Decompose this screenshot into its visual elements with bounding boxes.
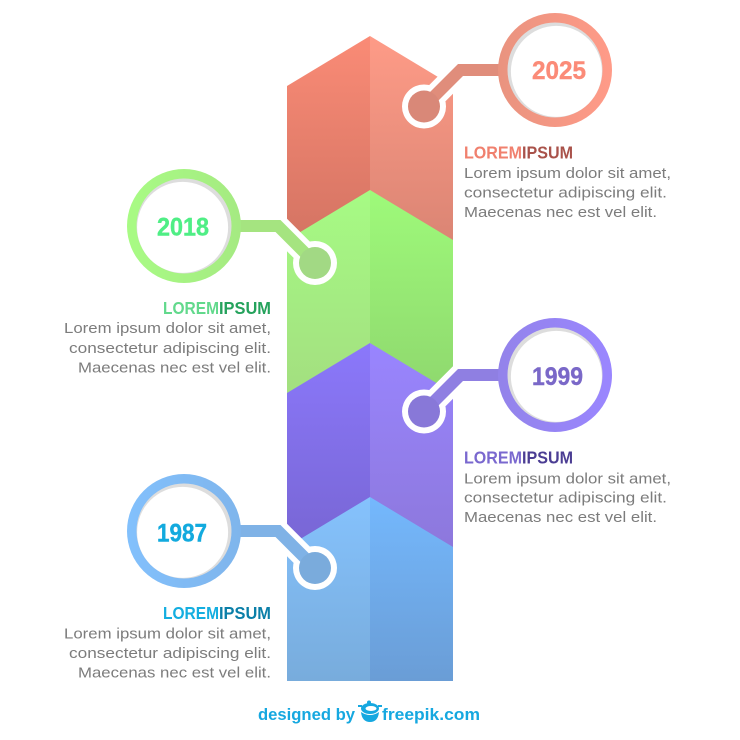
panel: blue chevron segment — [287, 497, 453, 681]
icon: freepik mascot — [358, 700, 382, 722]
text block: 2025 — [464, 142, 671, 221]
text block: 1999: consectetur adipiscing elit. — [464, 490, 667, 507]
circle badge: 1999 — [498, 318, 612, 432]
text block: 1999: LOREM — [464, 447, 522, 467]
circle badge: 2018 — [127, 169, 241, 283]
text block: 2018: Lorem ipsum dolor sit amet, — [64, 320, 271, 337]
text block: 1999 — [464, 447, 671, 526]
text block: 1999: IPSUM — [522, 447, 573, 467]
text block: 1987: IPSUM — [219, 603, 271, 623]
text block: 1987: LOREM — [163, 603, 219, 623]
footer: freepik credit — [258, 700, 480, 724]
text block: 2018: Maecenas nec est vel elit. — [78, 360, 271, 376]
footer: freepik credit: designed by — [258, 705, 356, 724]
text block: 1987: consectetur adipiscing elit. — [69, 645, 271, 662]
text block: 2018: LOREM — [163, 298, 219, 318]
connector: 1999 — [402, 366, 505, 434]
connector: 2025 — [402, 60, 505, 128]
text block: 2018: IPSUM — [219, 298, 271, 318]
footer: freepik credit: freepik.com — [382, 705, 480, 724]
circle badge: 2025 — [498, 13, 612, 127]
text block: 2025: consectetur adipiscing elit. — [464, 184, 667, 202]
text block: 2018: consectetur adipiscing elit. — [69, 340, 271, 357]
connector: 1987 — [236, 522, 337, 590]
connector: 2018 — [236, 217, 337, 285]
year: 1987: 1987 — [157, 520, 207, 548]
text block: 1999: Maecenas nec est vel elit. — [464, 509, 657, 526]
panel: green chevron segment — [287, 190, 453, 393]
text block: 2018 — [64, 298, 271, 376]
panel: red chevron segment — [287, 36, 453, 240]
text block: 2025: LOREM — [464, 142, 522, 162]
text block: 1987 — [64, 603, 271, 681]
year: 1999: 1999 — [532, 363, 583, 391]
text block: 2025: Maecenas nec est vel elit. — [464, 204, 657, 221]
text block: 1987: Maecenas nec est vel elit. — [78, 664, 271, 681]
circle badge: 1987 — [127, 474, 241, 588]
text block: 2025: IPSUM — [522, 142, 573, 162]
text block: 2025: Lorem ipsum dolor sit amet, — [464, 165, 671, 182]
panel: purple chevron segment — [287, 343, 453, 547]
year: 2025: 2025 — [532, 57, 586, 85]
year: 2018: 2018 — [157, 214, 209, 242]
text block: 1987: Lorem ipsum dolor sit amet, — [64, 625, 271, 642]
text block: 1999: Lorem ipsum dolor sit amet, — [464, 470, 671, 487]
